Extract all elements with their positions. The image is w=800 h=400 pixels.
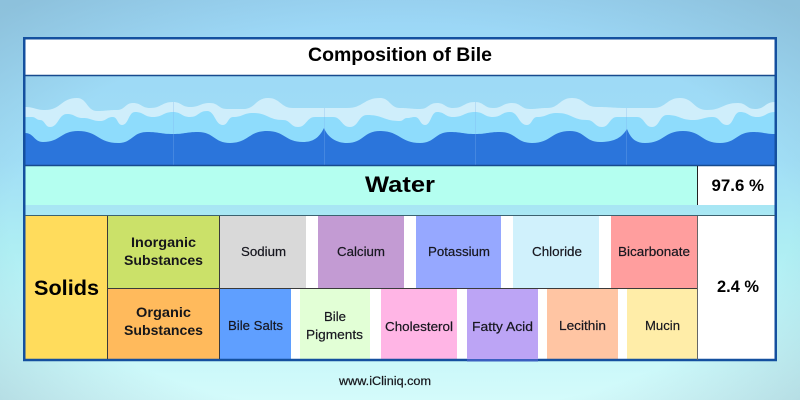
inorganic: chloride — [513, 216, 599, 288]
website footer: www.iCliniq.com — [338, 376, 431, 388]
wave: light blue layer — [25, 111, 775, 165]
organic: bile pigments — [300, 289, 370, 359]
organic: cholesterol: Cholesterol — [385, 319, 453, 334]
wave: deep blue layer — [25, 128, 775, 165]
organic: mucin: Mucin — [645, 318, 680, 333]
inorganic: calcium: Calcium — [337, 244, 385, 259]
organic: lecithin: Lecithin — [559, 318, 606, 333]
organic: bile pigments: Pigments — [306, 327, 364, 342]
organic: bile pigments: Bile — [324, 309, 346, 324]
organic substances cell: Organic — [136, 305, 192, 320]
table frame and rules — [24, 38, 776, 360]
inorganic: bicarbonate: Bicarbonate — [618, 244, 690, 259]
organic: bile salts: Bile Salts — [228, 318, 283, 333]
organic: fatty acid — [467, 289, 538, 362]
inorganic: sodium: Sodium — [241, 244, 286, 259]
inorganic substances cell: Inorganic — [131, 235, 197, 250]
wave: pale foam layer — [25, 98, 775, 165]
water percentage — [698, 166, 775, 205]
inorganic: chloride: Chloride — [532, 244, 582, 259]
organic: bile salts — [220, 289, 291, 359]
inorganic: potassium: Potassium — [428, 244, 490, 259]
inorganic substances cell — [108, 216, 219, 288]
inorganic: calcium — [318, 216, 404, 288]
solids percentage: 2.4 % — [717, 278, 759, 296]
inorganic substances cell: Substances — [124, 253, 203, 268]
solids label cell — [25, 216, 107, 359]
title bar: Composition of Bile — [308, 45, 492, 66]
organic: lecithin — [547, 289, 618, 359]
inorganic: potassium — [416, 216, 501, 288]
inorganic: bicarbonate — [611, 216, 697, 288]
inorganic: sodium — [220, 216, 306, 288]
organic: fatty acid: Fatty Acid — [472, 319, 533, 334]
water waves illustration — [25, 98, 775, 165]
water percentage: 97.6 % — [712, 177, 764, 195]
white backing for solids rows — [220, 216, 776, 359]
organic: mucin — [627, 289, 697, 359]
title bar — [25, 39, 775, 75]
organic substances cell: Substances — [124, 323, 203, 338]
water row — [25, 166, 697, 205]
organic substances cell — [108, 289, 219, 359]
solids label cell: Solids — [34, 276, 99, 300]
organic: cholesterol — [381, 289, 457, 359]
water row: Water — [365, 172, 436, 197]
